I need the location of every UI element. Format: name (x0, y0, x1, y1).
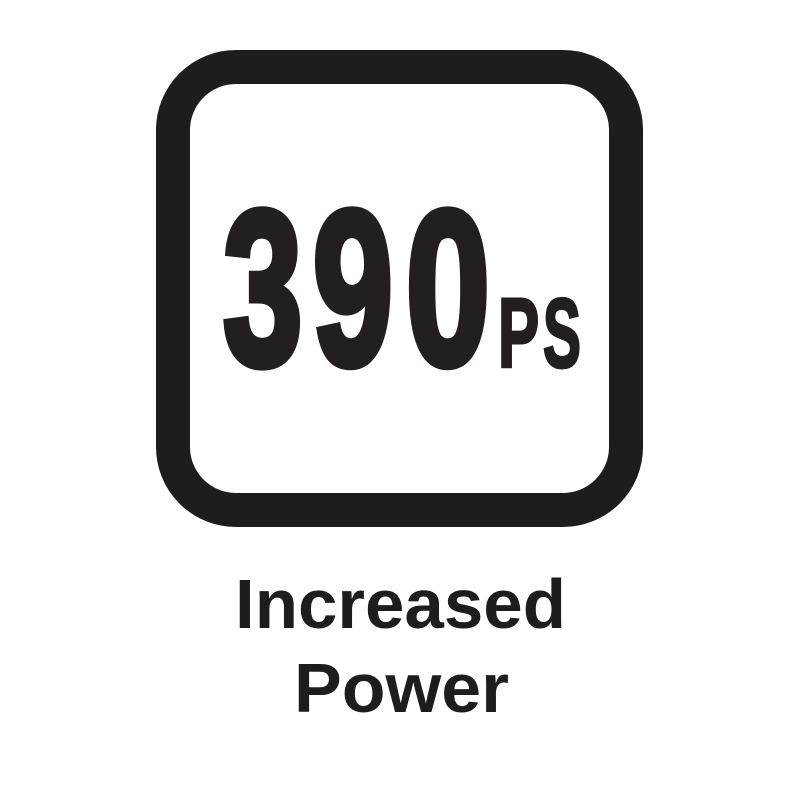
power value 390: 3 (223, 166, 303, 411)
caption line 1: Increased (235, 565, 566, 643)
caption line 2: Power (294, 649, 509, 727)
unit PS: S (543, 278, 581, 388)
icon: rounded square frame (173, 67, 626, 510)
unit PS: P (498, 280, 539, 389)
caption (235, 565, 566, 727)
unit PS (498, 278, 581, 389)
power value 390: 9 (313, 167, 393, 411)
power value 390 (223, 166, 490, 412)
power value 390: 0 (406, 166, 490, 412)
